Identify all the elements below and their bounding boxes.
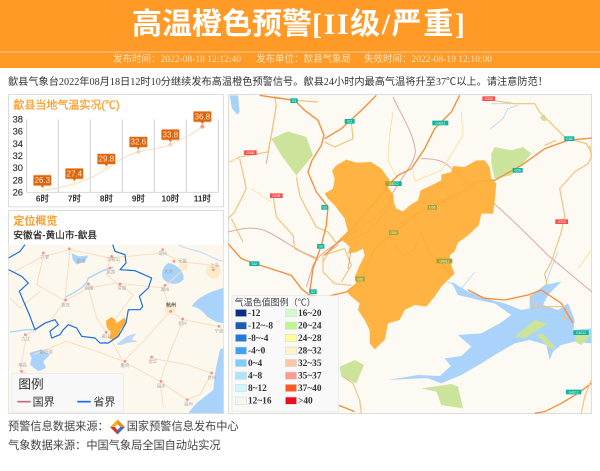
legend swatches right: [285, 309, 297, 404]
y axis labels: [13, 115, 23, 197]
locator map: [9, 245, 224, 413]
warning description: 歙县气象台2022年08月18日12时10分继续发布高温橙色预警信号。歙县24小时内最高气温将升至37℃以上。请注意防范！: [8, 77, 548, 88]
x axis labels: 11时: [194, 194, 212, 204]
legend labels: -8~-4: [248, 334, 269, 344]
route badges: G56: [357, 277, 363, 281]
city labels: 鄱阳湖: [40, 349, 53, 356]
city labels: 上海: [210, 262, 219, 269]
panel: main map: G4012: [569, 390, 579, 394]
urban areas: [165, 262, 221, 315]
map legend: 省界: [93, 395, 115, 408]
route badges: G4012: [439, 259, 449, 263]
legend heading: 气温色值图例（℃）: [235, 296, 316, 307]
data points: [40, 125, 204, 192]
header banner: [0, 0, 600, 68]
legend labels: 0~4: [248, 359, 263, 369]
rivers: [448, 104, 558, 289]
railways: [228, 97, 592, 292]
value badges: 27.4: [67, 169, 83, 178]
legend labels: -4~0: [248, 347, 266, 357]
legend labels: 4~8: [248, 372, 263, 382]
x axis labels: 8时: [100, 194, 113, 204]
x axis labels: 7时: [68, 194, 81, 204]
legend labels: 32~35: [298, 359, 322, 369]
map legend: 国界: [33, 395, 55, 408]
legend labels: [248, 309, 322, 407]
legend labels: >40: [298, 397, 313, 407]
map legend: 图例: [18, 378, 44, 392]
city labels: 丽水: [157, 382, 166, 389]
route badges: G3: [292, 99, 296, 103]
county area: Shexian: [325, 160, 496, 349]
y axis labels: 30: [13, 163, 23, 173]
green areas: [271, 115, 546, 179]
value badges: 32.6: [131, 138, 147, 147]
city labels: 绍兴: [178, 320, 188, 327]
legend labels: 24~28: [298, 334, 322, 344]
route badges: G205: [272, 194, 281, 198]
Qiandao lake: [388, 282, 591, 383]
legend labels: -12: [248, 309, 261, 319]
highways: [228, 95, 592, 297]
value badges: 29.8: [99, 155, 115, 164]
lake: upper left: [230, 95, 240, 115]
warning data source: 预警信息数据来源： 国家预警信息发布中心: [8, 421, 239, 433]
y axis labels: 38: [13, 115, 23, 125]
road network: [9, 250, 220, 413]
x axis labels: 9时: [132, 194, 145, 204]
city labels: 南昌: [18, 362, 27, 369]
panel: main map: [228, 94, 592, 414]
city labels: 温州: [184, 400, 193, 407]
location heading: 定位概览: [13, 214, 57, 228]
legend swatches left: [235, 309, 247, 404]
route badges: G56: [429, 206, 436, 210]
legend labels: 37~40: [298, 384, 322, 394]
y axis labels: 26: [13, 187, 23, 197]
weather data source: 气象数据来源：中国气象局全国自动站实况: [8, 440, 221, 452]
panel: temperature chart: [8, 94, 224, 208]
value badges: 36.8: [195, 112, 211, 121]
city labels: 宣城: [117, 285, 127, 292]
y axis labels: 36: [13, 127, 23, 137]
legend labels: 12~16: [248, 397, 272, 407]
title: 高温橙色预警[II级/严重]: [132, 8, 466, 41]
yellow roads: [228, 112, 591, 269]
legend labels: 8~12: [248, 384, 267, 394]
city labels: 无锡: [178, 258, 187, 265]
city labels: [18, 250, 224, 407]
city labels: 六安: [41, 253, 50, 260]
value badges: 26.3: [35, 176, 51, 185]
panel: location overview: [8, 210, 224, 414]
y axis labels: 28: [13, 175, 23, 185]
city labels: 马鞍山: [107, 256, 120, 263]
x axis labels: [36, 194, 212, 204]
x axis labels: 6时: [36, 194, 49, 204]
route badges: G56: [391, 231, 397, 235]
route badges: G330: [246, 151, 255, 155]
legend labels: 16~20: [298, 309, 322, 319]
city labels: 宁波: [215, 328, 224, 335]
route badges: G3: [318, 245, 323, 249]
route badges: G330: [485, 97, 493, 101]
southern roads: [338, 290, 591, 413]
city labels: 芜湖: [106, 269, 116, 276]
city labels: 常州: [158, 250, 167, 257]
icon: warning centre logo: [110, 420, 125, 434]
route badges: G4012: [435, 121, 445, 125]
sea: [192, 288, 223, 323]
legend labels: 35~37: [298, 372, 322, 382]
legend labels: 20~24: [298, 322, 322, 332]
route badges: G330: [558, 220, 566, 224]
map legend: [12, 374, 124, 412]
value badges: [33, 111, 211, 188]
location path: 安徽省-黄山市-歙县: [13, 229, 97, 241]
city labels: 九江: [22, 335, 31, 342]
header divider: [0, 51, 600, 53]
y axis labels: 34: [13, 139, 23, 149]
city labels: 黄山: [102, 333, 110, 340]
y axis labels: 32: [13, 151, 23, 161]
route badges: S42: [251, 262, 257, 266]
city labels: 巢湖: [77, 257, 86, 264]
temperature line: [42, 127, 202, 190]
route badges: G4012: [389, 182, 399, 186]
chart heading: 歙县当地气温实况(℃): [13, 98, 120, 112]
city labels: 安庆: [61, 301, 71, 308]
lake islands: [340, 320, 591, 408]
issue metadata: 发布时间：2022-08-18 12:12:40 发布单位：歙县气象局 失效时间：2022-08-19 12:10:00: [113, 55, 492, 65]
legend labels: -12~-8: [248, 322, 273, 332]
route badges: [244, 96, 574, 294]
lakes: [72, 253, 88, 265]
route badges: G3: [322, 206, 327, 210]
city labels: 铜陵: [85, 285, 94, 292]
route badges: G56: [566, 137, 573, 141]
route badges: G3: [311, 290, 315, 294]
secondary roads: [228, 97, 591, 289]
county area: [106, 317, 126, 340]
route badges: G56: [515, 169, 521, 173]
locator map: 杭州: [166, 302, 176, 309]
city labels: 台州: [207, 374, 216, 381]
city markers: [20, 247, 220, 401]
panel: main map: G4012: [576, 331, 586, 335]
city labels: 金华: [148, 358, 158, 365]
route badges: S11: [347, 120, 353, 124]
legend labels: 28~32: [298, 347, 322, 357]
x axis labels: 10时: [162, 194, 180, 204]
city labels: 太湖: [164, 268, 173, 275]
city labels: 湖州: [161, 286, 169, 293]
grey river network: [345, 205, 451, 275]
value badges: 33.8: [163, 130, 179, 139]
city labels: 衢州: [121, 362, 129, 369]
temperature colour legend: [232, 296, 339, 412]
province boundary: [9, 245, 152, 343]
